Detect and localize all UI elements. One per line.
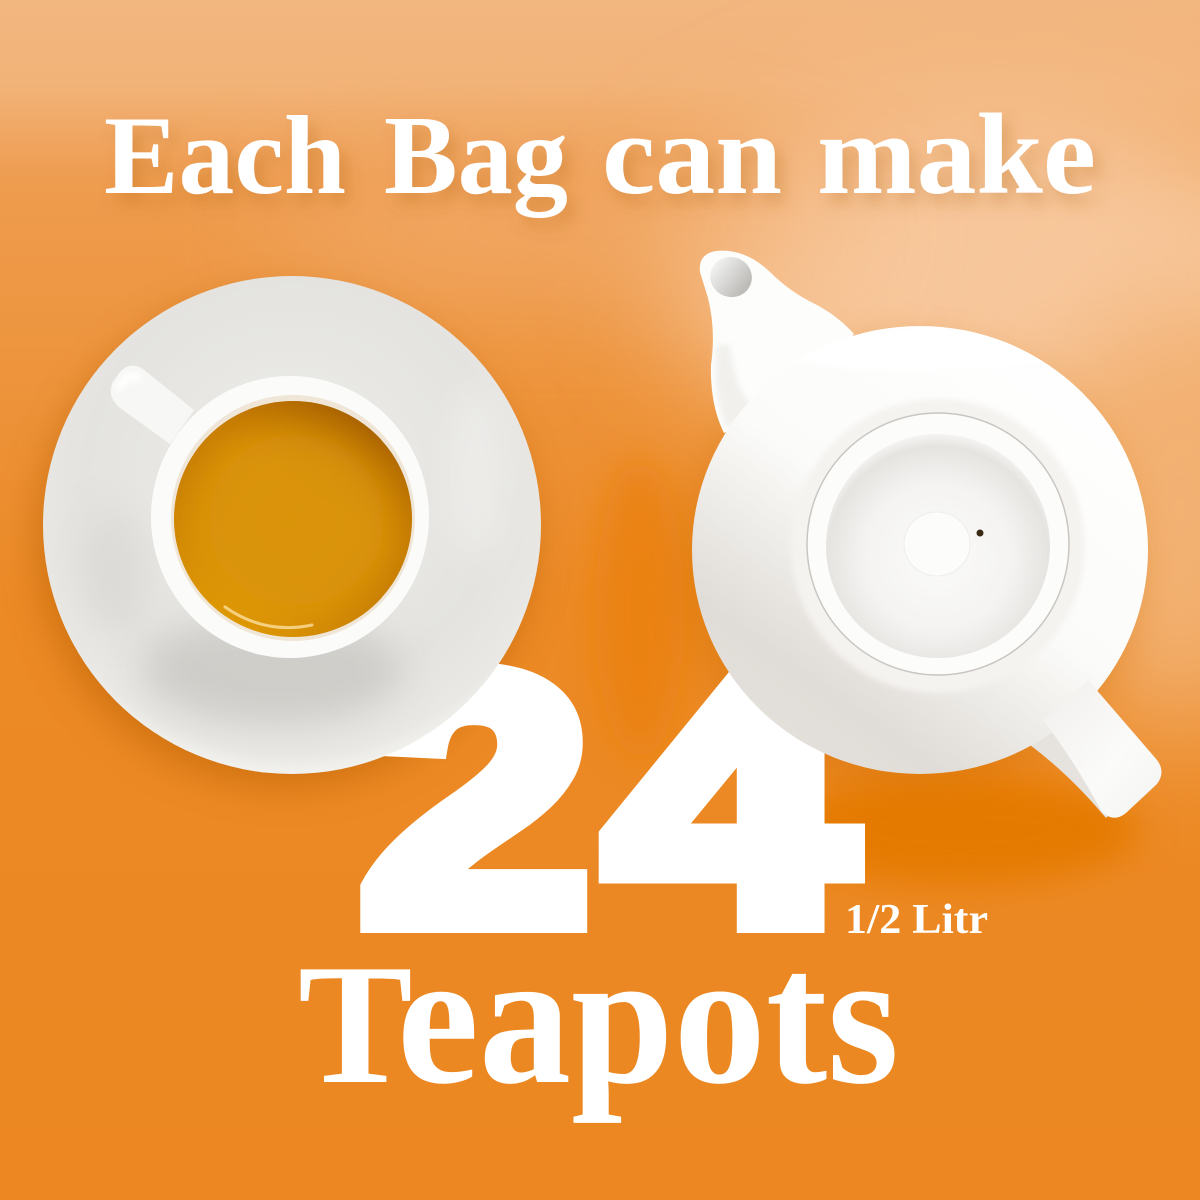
handle side [1030,715,1125,818]
word Each: Each [104,94,346,218]
word Bag: Bag [384,94,568,218]
word make: make [817,91,1096,219]
unit label: 1/2 Litr [845,897,988,943]
steam hole [976,530,984,536]
letter T: T [298,930,413,1120]
tea surface [174,401,412,637]
lid [807,413,1069,675]
icon: teapot [692,251,1162,818]
word Teapots [298,911,899,1124]
cup handle [111,366,194,444]
saucer [43,276,541,774]
big number 24 [360,601,855,996]
lid knob [904,512,970,576]
digit 2: 2 [360,602,590,996]
digit 4: 4 [607,601,855,996]
letters eapots: eapots [397,911,899,1124]
cup inner wall [171,395,415,641]
teapot body [692,326,1148,774]
shadows under cup saucer and teapot [35,292,1138,789]
body inner ring [791,399,1085,693]
icon: saucer, cup and tea [43,276,541,774]
word can: can [602,91,782,219]
teapot spout [700,251,854,433]
title [104,91,1096,219]
cup rim [151,376,429,658]
teapot handle [1043,680,1162,818]
